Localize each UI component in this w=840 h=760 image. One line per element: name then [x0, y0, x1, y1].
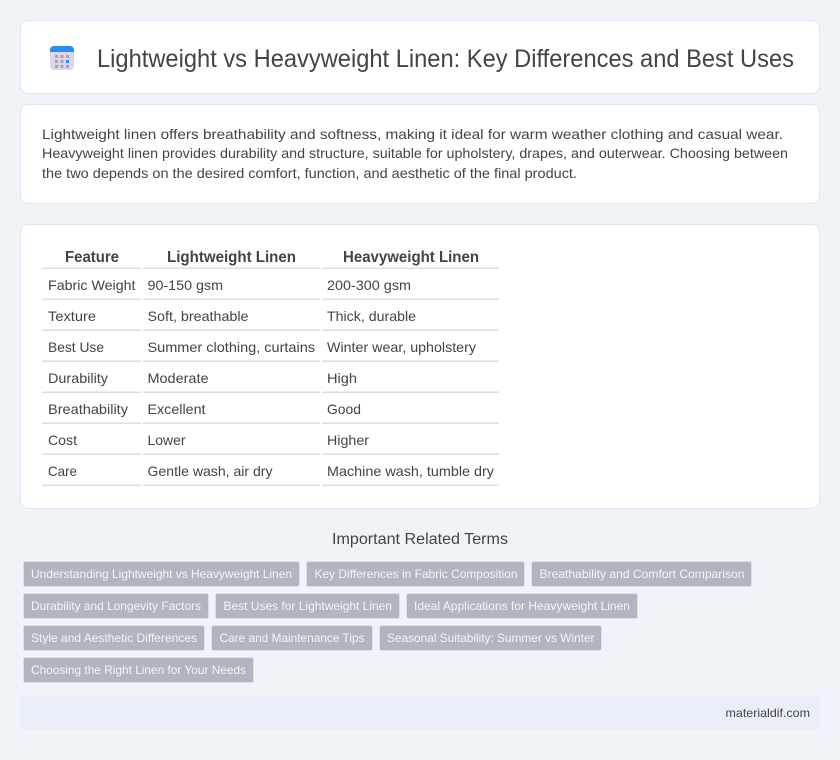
- related terms tags: [24, 562, 752, 682]
- row: fabric weight: 90-150 gsm: [148, 277, 223, 293]
- footer text: materialdif.com: [726, 706, 810, 720]
- title: Lightweight vs Heavyweight Linen: Key Differences and Best Uses: [97, 45, 794, 73]
- row: best use: Best Use: [48, 339, 104, 355]
- row: texture: Soft, breathable: [148, 308, 249, 324]
- text block: introduction: Lightweight linen offers breathability and softness, making it ideal for warm weather clothing and casual wear.: [42, 126, 783, 142]
- tag: [380, 626, 602, 650]
- table header row: Lightweight Linen: [167, 249, 296, 266]
- tag: [24, 626, 204, 650]
- row: durability: Durability: [48, 370, 108, 386]
- tag: [212, 626, 372, 650]
- row: breathability: Excellent: [148, 401, 206, 417]
- panel: title header: [20, 20, 820, 94]
- tag: Key Differences in Fabric Composition: [314, 567, 518, 581]
- tag: [216, 594, 400, 618]
- row: care: Machine wash, tumble dry: [327, 463, 494, 479]
- tag: [532, 562, 752, 586]
- table header row: Heavyweight Linen: [343, 249, 479, 266]
- row: cost: [48, 432, 369, 448]
- row: durability: Moderate: [148, 370, 209, 386]
- tag: Style and Aesthetic Differences: [31, 631, 197, 645]
- text block: introduction: [42, 126, 788, 181]
- tag: [24, 562, 300, 586]
- panel: introduction: [20, 104, 820, 204]
- row: cost: Higher: [327, 432, 369, 448]
- tag: [24, 594, 208, 618]
- text block: introduction: the two depends on the desired comfort, function, and aesthetic of the final product.: [42, 165, 577, 181]
- row: texture: Thick, durable: [327, 308, 416, 324]
- tag: Breathability and Comfort Comparison: [540, 567, 744, 581]
- row: care: Care: [48, 463, 77, 479]
- tag: [406, 594, 638, 618]
- tag: Care and Maintenance Tips: [220, 631, 364, 645]
- panel: comparison table: [20, 224, 820, 508]
- tag: Durability and Longevity Factors: [31, 599, 201, 613]
- row: best use: Winter wear, upholstery: [327, 339, 476, 355]
- row: fabric weight: 200-300 gsm: [327, 277, 411, 293]
- row: best use: [48, 339, 476, 355]
- icon: calendar: [50, 46, 74, 70]
- tag: Seasonal Suitability: Summer vs Winter: [387, 631, 595, 645]
- row: texture: [48, 308, 416, 324]
- table header row: Feature: [65, 249, 119, 266]
- row: breathability: Breathability: [48, 401, 128, 417]
- row: durability: High: [327, 370, 357, 386]
- tag: Understanding Lightweight vs Heavyweight Linen: [31, 567, 292, 581]
- heading: important related terms: Important Related Terms: [332, 531, 508, 548]
- tag: [306, 562, 524, 586]
- row: care: [48, 463, 494, 479]
- tag: Best Uses for Lightweight Linen: [224, 599, 392, 613]
- row: durability: [48, 370, 357, 386]
- row: breathability: Good: [327, 401, 361, 417]
- row: fabric weight: [48, 277, 411, 293]
- footer bar: [20, 696, 820, 730]
- row: care: Gentle wash, air dry: [148, 463, 272, 479]
- tag: Ideal Applications for Heavyweight Linen: [414, 599, 630, 613]
- tag: Choosing the Right Linen for Your Needs: [31, 663, 246, 677]
- row: best use: Summer clothing, curtains: [148, 339, 315, 355]
- table header row: [65, 249, 479, 266]
- row: texture: Texture: [48, 308, 96, 324]
- row: fabric weight: Fabric Weight: [48, 277, 136, 293]
- tag: [24, 658, 254, 682]
- row: cost: Lower: [148, 432, 186, 448]
- text block: introduction: Heavyweight linen provides durability and structure, suitable for upholstery, drapes, and outerwear. Choosing between: [42, 145, 788, 161]
- row: cost: Cost: [48, 432, 77, 448]
- row: breathability: [48, 401, 361, 417]
